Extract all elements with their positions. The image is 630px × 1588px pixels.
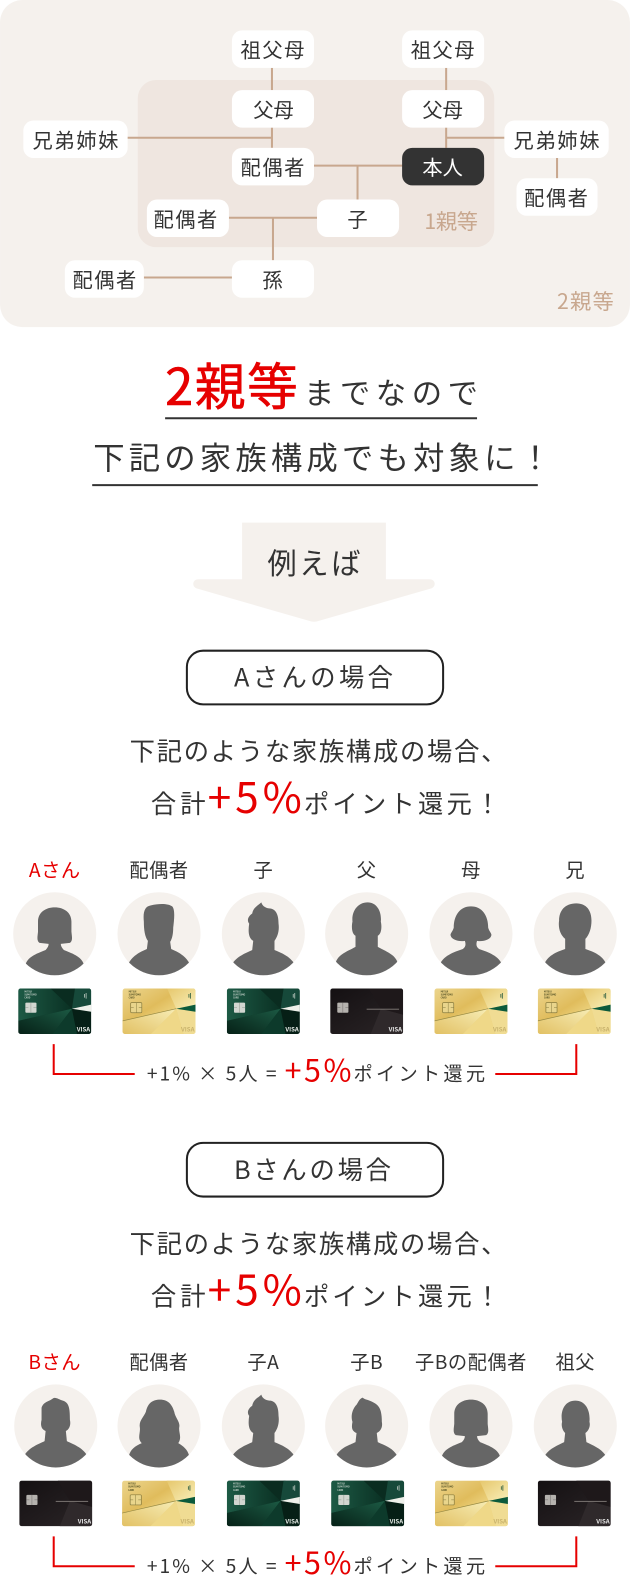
member A: child	[222, 855, 305, 1034]
node: sibling spouse: 配偶者	[524, 183, 588, 212]
node: child spouse	[147, 200, 229, 237]
node: grandparents left: 祖父母	[241, 35, 304, 64]
node: siblings left	[23, 121, 128, 158]
node: grandparents left	[232, 30, 314, 68]
text: case B description: 下記のような家族構成の場合、	[130, 1225, 506, 1261]
member A: father	[325, 855, 408, 1034]
text: case B description: +5%	[208, 1257, 302, 1318]
member B: grandfather	[534, 1347, 617, 1526]
heading: two degrees	[92, 346, 551, 485]
node: parents right: 父母	[422, 94, 463, 123]
text: case B description: 合計	[151, 1277, 206, 1313]
arrow: for example: 例えば	[267, 541, 361, 583]
member B: spouse	[118, 1347, 201, 1526]
text: case B description: ポイント還元！	[304, 1277, 500, 1313]
node: siblings right: 兄弟姉妹	[514, 125, 600, 154]
node: self	[402, 148, 484, 185]
case header: A	[187, 651, 443, 704]
member A: mother	[429, 855, 512, 1034]
text: case A description	[130, 733, 506, 826]
node: siblings left: 兄弟姉妹	[32, 125, 119, 154]
member A: mother: 母	[461, 855, 481, 883]
sum bracket A: ポイント還元	[353, 1059, 485, 1087]
case header: A: Aさんの場合	[234, 659, 393, 695]
node: grandparents right: 祖父母	[411, 35, 475, 64]
node: grandchild	[232, 260, 314, 298]
node: siblings right	[504, 121, 609, 158]
node: child: 子	[347, 204, 368, 233]
sum bracket A: +5%	[285, 1047, 351, 1091]
text: case B description	[130, 1225, 506, 1318]
member A: spouse: 配偶者	[129, 855, 189, 883]
label: second degree: 2親等	[557, 285, 614, 316]
sum bracket A: +1% × 5人 =	[147, 1059, 277, 1087]
sum bracket A	[54, 1044, 576, 1091]
member A: child: 子	[253, 855, 273, 883]
member B: child A: 子A	[247, 1347, 279, 1375]
member A: father: 父	[357, 855, 377, 883]
panel: first degree area	[138, 80, 494, 247]
text: case A description: +5%	[208, 765, 302, 826]
sum bracket B	[54, 1536, 576, 1583]
text: case A description: 下記のような家族構成の場合、	[130, 733, 506, 769]
text: case A description: 合計	[151, 785, 206, 821]
member B: spouse: 配偶者	[129, 1347, 189, 1375]
heading: two degrees: 下記の家族構成でも対象に！	[93, 434, 551, 479]
member A: spouse	[118, 855, 201, 1034]
label: first degree: 1親等	[424, 205, 478, 236]
case header: B: Bさんの場合	[234, 1151, 391, 1187]
node: child	[317, 200, 399, 237]
node: spouse: 配偶者	[241, 152, 304, 181]
member A: self	[13, 855, 96, 1034]
node: self: 本人	[422, 152, 463, 181]
arrow: for example	[193, 523, 435, 622]
sum bracket B: +5%	[285, 1539, 351, 1583]
node: parents left: 父母	[253, 94, 294, 123]
heading: two degrees: 2親等	[165, 346, 298, 420]
node: spouse	[232, 148, 314, 185]
node: sibling spouse	[517, 178, 598, 216]
member A: brother	[534, 855, 617, 1034]
member B: self: Bさん	[28, 1347, 81, 1375]
node: parents left	[232, 90, 314, 128]
node: grandchild: 孫	[262, 265, 283, 294]
node: grandparents right	[402, 30, 484, 68]
heading: two degrees: までなので	[304, 369, 478, 413]
node: grandchild spouse	[65, 260, 144, 298]
member B: grandfather: 祖父	[556, 1347, 595, 1375]
text: case A description: ポイント還元！	[304, 785, 500, 821]
member B: child B: 子B	[350, 1347, 383, 1375]
member B: child B spouse: 子Bの配偶者	[415, 1347, 527, 1375]
member A: brother: 兄	[565, 855, 585, 883]
member B: child B spouse	[415, 1347, 527, 1526]
node: grandchild spouse: 配偶者	[72, 265, 136, 294]
node: parents right	[402, 90, 484, 128]
sum bracket B: ポイント還元	[353, 1551, 485, 1579]
node: child spouse: 配偶者	[153, 204, 217, 233]
member A: self: Aさん	[29, 855, 81, 883]
member B: self	[14, 1347, 97, 1526]
member B: child A	[222, 1347, 305, 1526]
panel: kinship degree chart	[0, 0, 630, 327]
case header: B	[187, 1143, 443, 1197]
sum bracket B: +1% × 5人 =	[147, 1551, 277, 1579]
member B: child B	[325, 1347, 408, 1526]
